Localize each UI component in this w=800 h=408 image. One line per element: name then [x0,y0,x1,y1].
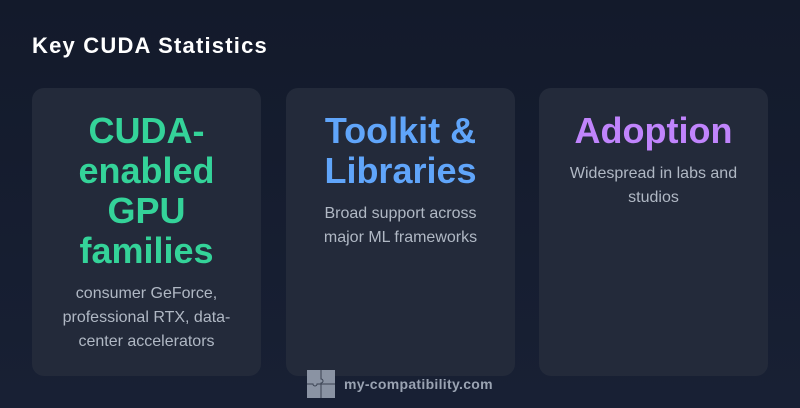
heading: GPU families: enabled [78,150,215,191]
heading: GPU families: GPU [107,190,186,231]
panel: GPU families [32,88,261,376]
text: toolkit description: Broad support across major ML frameworks [324,205,477,246]
icon: puzzle [307,370,335,398]
heading: toolkit: Libraries [324,150,477,191]
footer: my-compatibility.com [344,376,493,392]
heading: toolkit: Toolkit & [325,110,476,151]
text: adoption description: Widespread in labs and studios [570,165,737,206]
heading: GPU families: families [79,230,214,271]
title: Key CUDA Statistics [32,33,268,58]
heading: adoption: Adoption [575,110,732,151]
footer [307,370,493,398]
panel: toolkit [286,88,515,376]
heading: toolkit [324,110,477,191]
text: GPU families description: consumer GeForce, professional RTX, data-center accelerators [63,285,230,350]
heading: GPU families [78,110,215,271]
panel: adoption [539,88,768,376]
heading: GPU families: CUDA- [88,110,204,151]
